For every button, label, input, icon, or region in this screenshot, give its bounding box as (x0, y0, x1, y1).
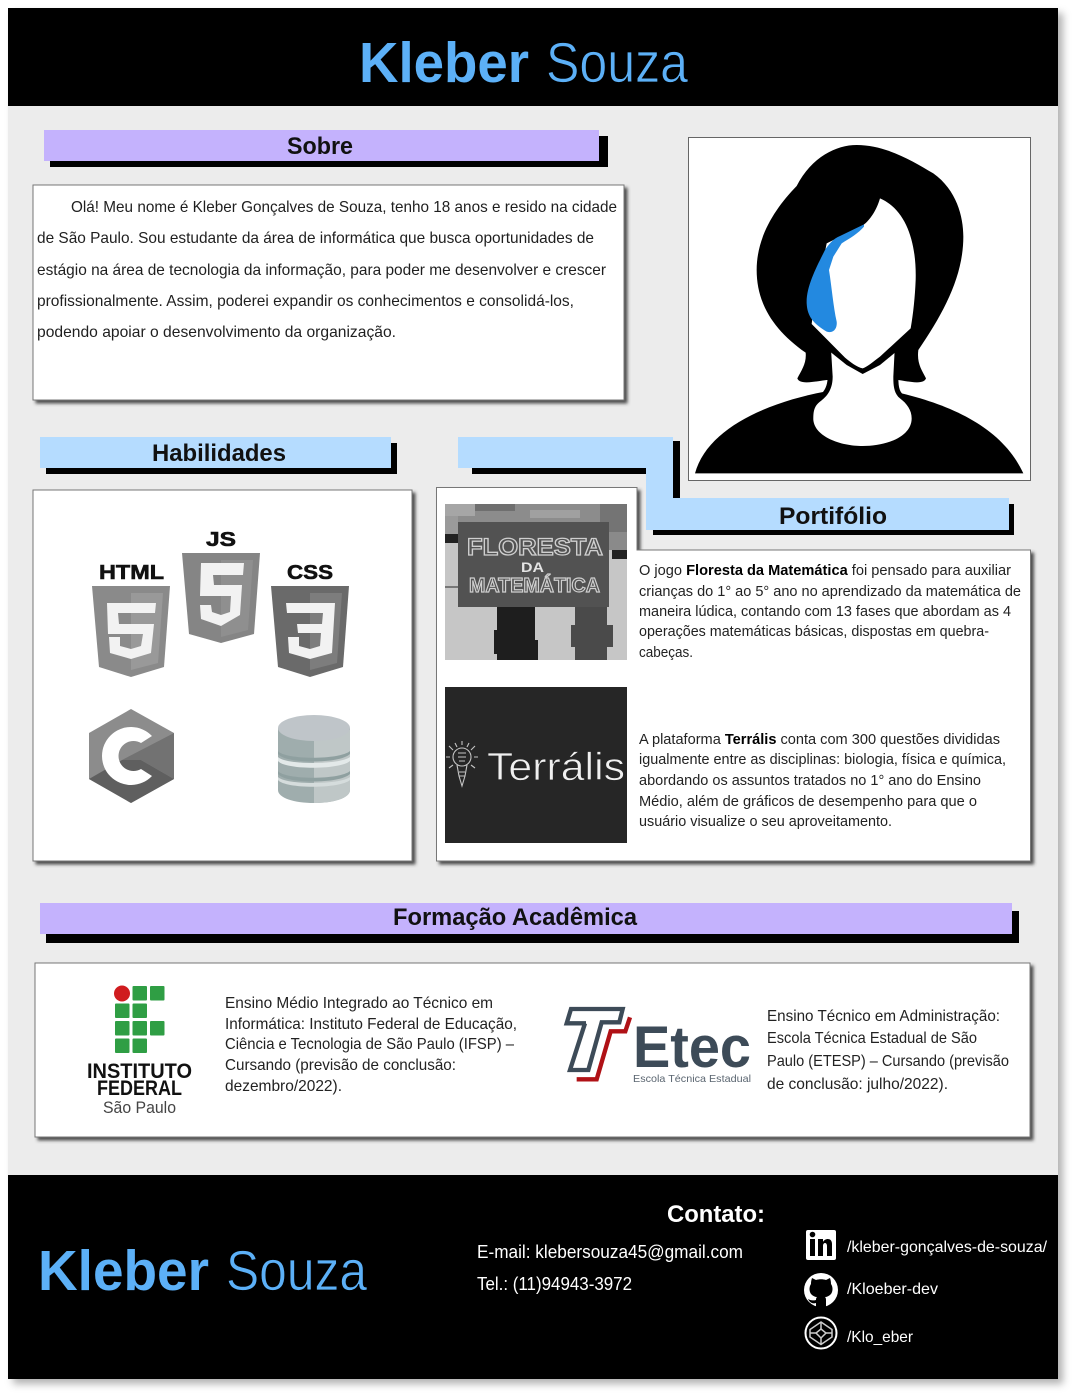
education text: ETESP: Ensino Técnico em Administração: (767, 1008, 1000, 1025)
icon: GitHub (804, 1273, 838, 1307)
portfolio text: Floresta: maneira lúdica, contando com 13 fases que abordam as 4 (639, 603, 1011, 620)
heading: Formação Acadêmica (40, 903, 1019, 943)
footer band (8, 1175, 1058, 1379)
contact details: Tel.: (11)94943-3972 (477, 1274, 632, 1294)
portfolio text: Floresta: operações matemáticas básicas, dispostas em quebra- (639, 623, 989, 640)
about paragraph: estágio na área de tecnologia da informação, para poder me desenvolver e crescer (37, 262, 607, 279)
heading: Portifólio: Portifólio (779, 503, 887, 530)
panel: portrait (688, 138, 1030, 480)
education text: IFSP: Informática: Instituto Federal de Educação, (225, 1016, 517, 1033)
footer name (38, 1239, 367, 1303)
heading: Habilidades: Habilidades (152, 440, 286, 467)
image: Floresta da Matemática: DA (521, 559, 544, 575)
heading: Portifólio (458, 437, 1014, 535)
logo: Etec: Etec (633, 1015, 751, 1080)
GitHub handle: /Kloeber-dev (847, 1281, 938, 1298)
logo: Etec (567, 1009, 751, 1085)
heading: Sobre: Sobre (287, 133, 353, 160)
image: Floresta da Matemática (445, 504, 627, 660)
education text: ETESP: Escola Técnica Estadual de São (767, 1030, 977, 1047)
heading: Sobre (44, 130, 608, 167)
panel: skills (33, 490, 412, 861)
portfolio text: Floresta: crianças do 1° ao 5° ano no aprendizado da matemática de (639, 583, 1021, 600)
portfolio text: Terrális: Médio, além de gráficos de desempenho para que o (639, 793, 977, 810)
logo: Instituto Federal: FEDERAL (97, 1077, 182, 1100)
heading: Formação Acadêmica: Formação Acadêmica (393, 904, 638, 931)
LinkedIn handle: /kleber-gonçalves-de-souza/ (847, 1239, 1048, 1256)
image: Floresta da Matemática: FLORESTA (467, 534, 603, 561)
icon: LinkedIn (806, 1230, 836, 1260)
education text: IFSP: Ensino Médio Integrado ao Técnico em (225, 995, 493, 1012)
portfolio text: Floresta: cabeças. (639, 644, 693, 661)
image: Terrális: Terrális (487, 746, 625, 789)
education text: IFSP: dezembro/2022). (225, 1078, 342, 1095)
CodePen handle: /Klo_eber (847, 1329, 914, 1346)
image: Floresta da Matemática: MATEMÁTICA (469, 574, 600, 597)
title: Souza (546, 31, 688, 95)
education text: ETESP: Paulo (ETESP) – Cursando (previsão (767, 1053, 1009, 1070)
about paragraph: podendo apoiar o desenvolvimento da organização. (37, 324, 396, 341)
header band (8, 8, 1058, 106)
logo: Instituto Federal (87, 986, 192, 1117)
icon: database (278, 715, 350, 803)
logo: Instituto Federal: INSTITUTO (87, 1060, 192, 1083)
footer name: Souza (226, 1239, 367, 1303)
education text: IFSP: Cursando (previsão de conclusão: (225, 1057, 456, 1074)
contact details (477, 1242, 743, 1294)
contact heading: Contato: (667, 1201, 765, 1228)
education text: ETESP: de conclusão: julho/2022). (767, 1076, 948, 1093)
logo: Etec: Escola Técnica Estadual (633, 1073, 751, 1085)
icon: JavaScript: JS (206, 529, 236, 551)
portfolio text: Terrális: A plataforma Terrális conta com 300 questões divididas (639, 731, 1000, 748)
portfolio text: Terrális (639, 731, 1006, 830)
about paragraph: Olá! Meu nome é Kleber Gonçalves de Souza, tenho 18 anos e resido na cidade (71, 199, 617, 216)
about paragraph: profissionalmente. Assim, poderei expandir os conhecimentos e consolidá-los, (37, 293, 574, 310)
logo: Instituto Federal: São Paulo (103, 1098, 176, 1117)
education text: IFSP: Ciência e Tecnologia de São Paulo (IFSP) – (225, 1036, 514, 1053)
icon: CodePen (806, 1318, 836, 1348)
contact details: E-mail: klebersouza45@gmail.com (477, 1242, 743, 1262)
panel: about text (33, 185, 624, 400)
icon: C language (89, 709, 174, 803)
about paragraph: de São Paulo. Sou estudante da área de informática que busca oportunidades de (37, 230, 594, 247)
icon: HTML5: HTML (99, 562, 164, 584)
icon: JavaScript (182, 529, 260, 643)
title (359, 31, 688, 95)
footer name: Kleber (38, 1239, 209, 1303)
education text: ETESP (767, 1008, 1009, 1093)
image: Terrális (445, 687, 627, 843)
icon: avatar (695, 145, 1023, 473)
portfolio text: Terrális: igualmente entre as disciplinas: biologia, física e química, (639, 751, 1006, 768)
portfolio text: Terrális: abordando os assuntos tratados no 1° ano do Ensino (639, 772, 981, 789)
panel: portfolio (436, 488, 1030, 861)
panel: education (35, 963, 1030, 1137)
about paragraph (37, 199, 617, 341)
title: Kleber (359, 31, 529, 95)
portfolio text: Terrális: usuário visualize o seu aproveitamento. (639, 813, 892, 830)
icon: CSS3 (271, 562, 349, 677)
heading: Habilidades (40, 437, 397, 474)
icon: HTML5 (92, 562, 170, 677)
education text: IFSP (225, 995, 517, 1095)
icon: CSS3: CSS (287, 562, 333, 584)
portfolio text: Floresta: O jogo Floresta da Matemática foi pensado para auxiliar (639, 562, 1011, 579)
portfolio text: Floresta (639, 562, 1021, 661)
